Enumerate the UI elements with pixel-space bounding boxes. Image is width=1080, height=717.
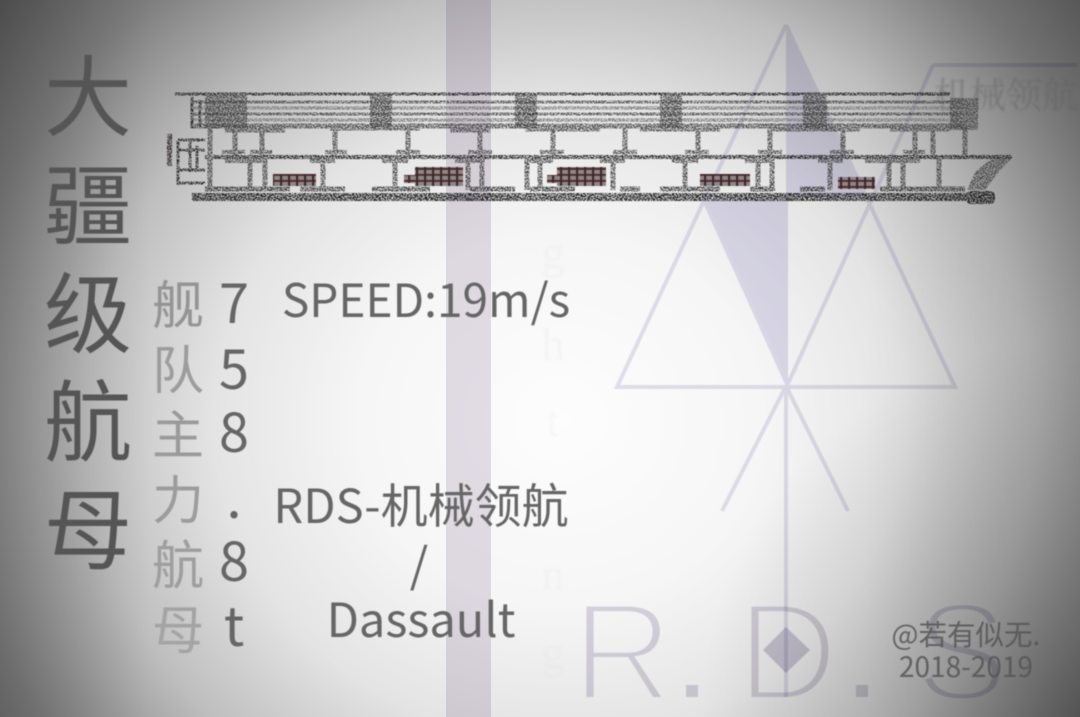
ship: cross-section (167, 94, 1012, 204)
icon: diamond (763, 627, 810, 673)
maker: RDS-机械领航 (273, 468, 569, 537)
subtitle: 舰队主力航母 (152, 264, 204, 664)
credit (892, 613, 1040, 686)
vertical band (446, 0, 491, 717)
ghost vertical letters (542, 227, 564, 678)
subtitle: 舰队主力航母: 舰 (152, 264, 204, 339)
title: 母 (44, 461, 132, 588)
subtitle: 舰队主力航母: 主 (152, 394, 204, 469)
speed: SPEED:19m/s (282, 265, 570, 331)
tonnage: 758.8t: 7 (219, 260, 249, 339)
title (44, 28, 132, 588)
subtitle: 舰队主力航母: 队 (152, 329, 204, 404)
ghost vertical letters: n (542, 549, 564, 600)
ghost vertical letters: g (542, 227, 564, 278)
ship: cargo 4 (700, 174, 750, 186)
maker (273, 468, 569, 651)
title: 级 (44, 245, 132, 372)
ship: keel band (192, 191, 995, 204)
subtitle: 舰队主力航母: 母 (152, 589, 204, 664)
tonnage: 758.8t: 5 (219, 326, 249, 405)
tonnage: 758.8t: 8 (219, 389, 249, 468)
title: 疆 (44, 137, 132, 264)
title: 航 (44, 353, 132, 480)
tonnage: 758.8t (219, 260, 249, 662)
logo wordmark: R. D. S (586, 605, 999, 698)
subtitle: 舰队主力航母: 航 (152, 524, 204, 599)
tonnage: 758.8t: 8 (219, 518, 249, 597)
ghost vertical letters: h (542, 319, 564, 370)
logo: filled facet (704, 25, 868, 388)
maker: Dassault (327, 582, 516, 651)
ship: cargo 5 (838, 177, 875, 189)
subtitle: 舰队主力航母: 力 (152, 459, 204, 534)
credit: 2018-2019 (899, 646, 1033, 686)
credit: @若有似无. (892, 613, 1040, 654)
ghost text: 机械领航: 机械领航 (934, 68, 1078, 119)
logo: triangles emblem (617, 25, 1077, 697)
title: 大 (44, 28, 132, 155)
tonnage: 758.8t: . (226, 455, 242, 534)
ship: structure (175, 94, 1012, 190)
maker: / (410, 527, 428, 596)
ship: dense pillars (205, 95, 1012, 190)
ship: cargo 2 (404, 167, 463, 186)
ship: cargo 1 (273, 174, 316, 186)
ghost vertical letters: t (547, 395, 560, 446)
tonnage: 758.8t: t (224, 583, 244, 662)
ship: stern mast (167, 134, 172, 166)
ship: cargo 3 (547, 167, 606, 186)
ghost vertical letters: g (542, 627, 564, 678)
